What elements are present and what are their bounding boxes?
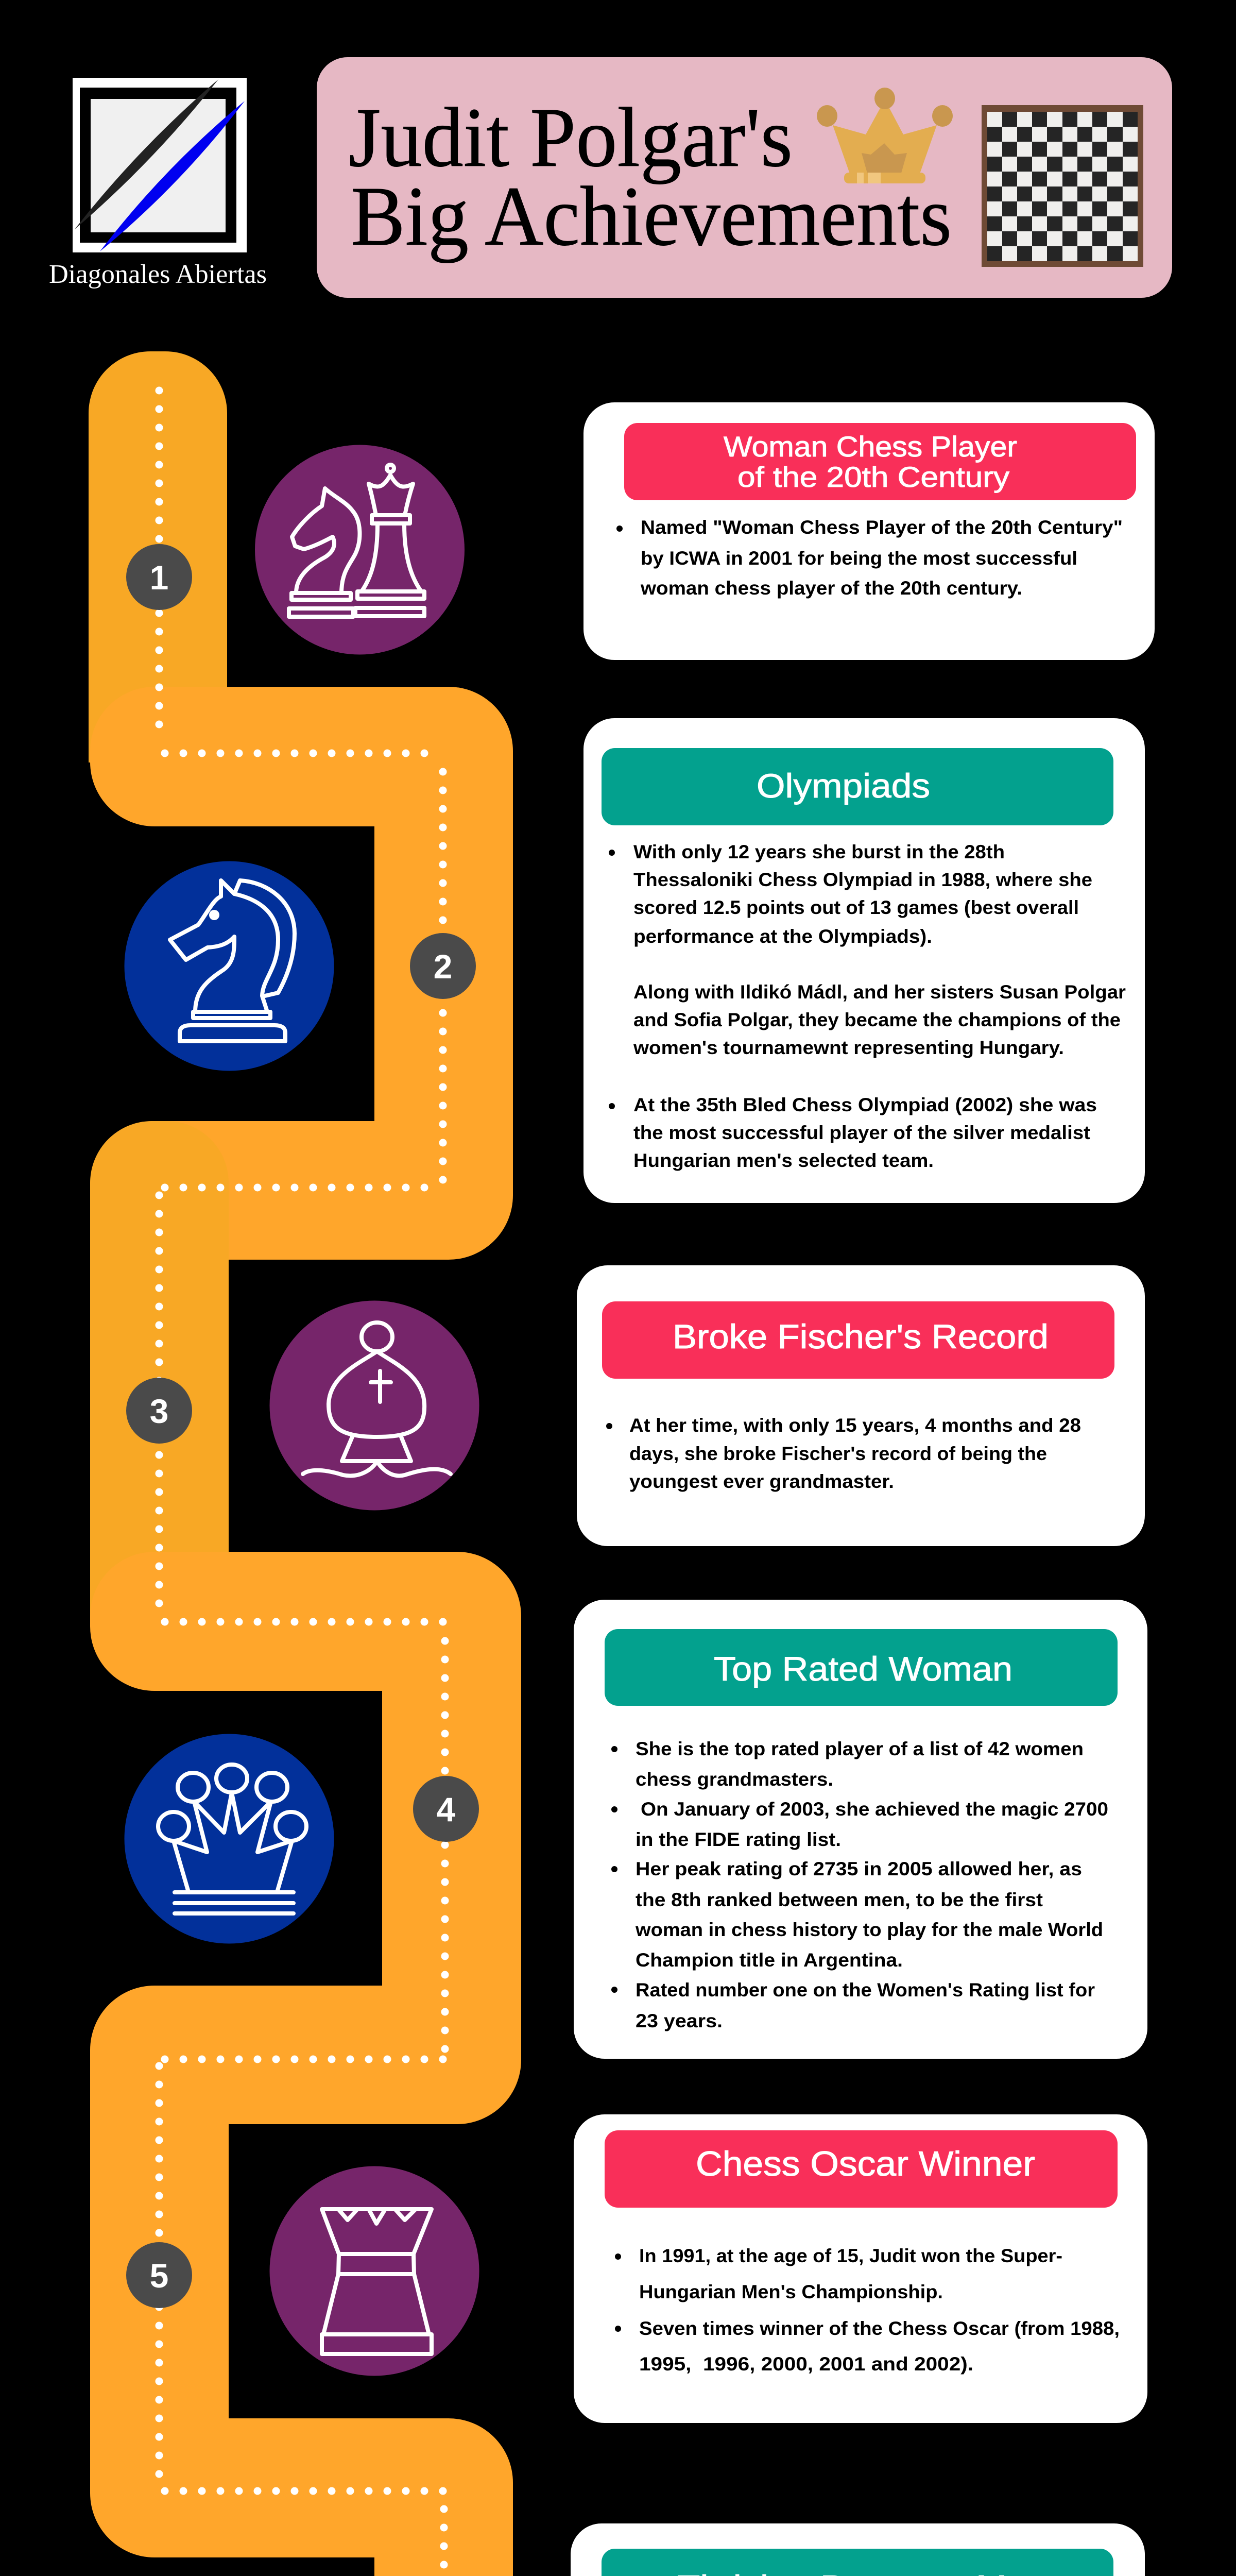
text block [606, 1415, 1081, 1492]
heading [624, 423, 1136, 500]
text block [609, 841, 1126, 1171]
icon: knight [125, 861, 334, 1071]
text block [611, 1738, 1108, 2031]
heading: of the 20th Century [737, 461, 1009, 493]
text block: Along with Ildikó Mádl, and her sisters Susan Polgar [633, 981, 1126, 1003]
panel: Woman Chess Player [583, 402, 1155, 660]
text block [616, 517, 1123, 599]
title banner [317, 57, 1172, 298]
text block: At her time, with only 15 years, 4 months and 28 [629, 1415, 1081, 1436]
heading: Olympiads [757, 767, 930, 805]
heading: Top Rated Woman [714, 1650, 1012, 1688]
text block: She is the top rated player of a list of 42 women [636, 1738, 1084, 1759]
step number 4: 4 [437, 1790, 456, 1828]
heading: Judit Polgar's [349, 90, 793, 184]
heading: Chess Oscar Winner [696, 2144, 1035, 2183]
icon: knight and queen [255, 445, 465, 654]
text block: On January of 2003, she achieved the magic 2700 [641, 1799, 1108, 1820]
step number 2 [410, 933, 476, 999]
step number 3: 3 [150, 1392, 168, 1430]
icon: gold crown [817, 88, 953, 183]
text block: in the FIDE rating list. [636, 1829, 841, 1850]
text block: scored 12.5 points out of 13 games (best overall [633, 897, 1079, 918]
text block: woman chess player of the 20th century. [640, 578, 1022, 599]
text block: Champion title in Argentina. [636, 1950, 903, 1971]
panel: Chess Oscar Winner [574, 2114, 1147, 2423]
panel: Broke Fischer's Record [577, 1265, 1145, 1546]
heading: Broke Fischer's Record [673, 1317, 1049, 1355]
heading [602, 1301, 1114, 1379]
winding orange road [89, 351, 521, 2576]
text block [615, 2245, 1120, 2375]
text block: In 1991, at the age of 15, Judit won the Super- [639, 2245, 1062, 2266]
heading [602, 2549, 1113, 2576]
heading: Big Achievements [351, 169, 952, 263]
step number 3 [126, 1378, 192, 1444]
step number 5 [126, 2242, 192, 2308]
step number 5: 5 [150, 2257, 168, 2295]
panel: Thriving Between Men [571, 2523, 1145, 2576]
heading [605, 2130, 1118, 2208]
text block: women's tournamewnt representing Hungary. [633, 1037, 1064, 1058]
text block: the most successful player of the silver medalist [633, 1122, 1090, 1143]
icon: bishop [270, 1300, 479, 1511]
text block: performance at the Olympiads). [633, 926, 932, 947]
heading [605, 1629, 1118, 1706]
text block: Her peak rating of 2735 in 2005 allowed her, as [636, 1858, 1082, 1879]
text block: With only 12 years she burst in the 28th [633, 841, 1005, 862]
text block: youngest ever grandmaster. [629, 1471, 894, 1492]
step number 1 [126, 544, 192, 610]
logo: Diagonales Abiertas [49, 78, 267, 289]
text block: the 8th ranked between men, to be the first [636, 1889, 1043, 1910]
text block: 1995, 1996, 2000, 2001 and 2002). [639, 2353, 973, 2375]
text block: Hungarian Men's Championship. [639, 2281, 943, 2302]
text block: by ICWA in 2001 for being the most successful [641, 548, 1077, 569]
icon: queen crown [125, 1734, 334, 1943]
text block: Named "Woman Chess Player of the 20th Century" [641, 517, 1123, 538]
text block: days, she broke Fischer's record of being the [629, 1443, 1047, 1464]
text block: Rated number one on the Women's Rating list for [636, 1979, 1095, 2001]
panel: Olympiads [583, 718, 1145, 1203]
text block: 23 years. [636, 2010, 723, 2031]
text block: At the 35th Bled Chess Olympiad (2002) she was [633, 1094, 1097, 1115]
text block: Hungarian men's selected team. [633, 1150, 934, 1171]
step number 1: 1 [150, 558, 168, 597]
panel: Top Rated Woman [574, 1600, 1147, 2059]
text block: Seven times winner of the Chess Oscar (from 1988, [639, 2318, 1120, 2339]
icon: chess board [982, 105, 1143, 267]
step number 2: 2 [434, 947, 452, 986]
text block: Thessaloniki Chess Olympiad in 1988, where she [633, 869, 1092, 890]
heading [602, 748, 1113, 825]
icon: rook [270, 2166, 479, 2376]
text block: chess grandmasters. [636, 1769, 833, 1790]
logo: Diagonales Abiertas: Diagonales Abiertas [49, 260, 267, 289]
heading [349, 90, 952, 263]
heading: Woman Chess Player [724, 430, 1017, 463]
text block: woman in chess history to play for the male World [635, 1919, 1103, 1940]
text block: and Sofia Polgar, they became the champions of the [633, 1009, 1121, 1030]
step number 4 [413, 1776, 479, 1842]
